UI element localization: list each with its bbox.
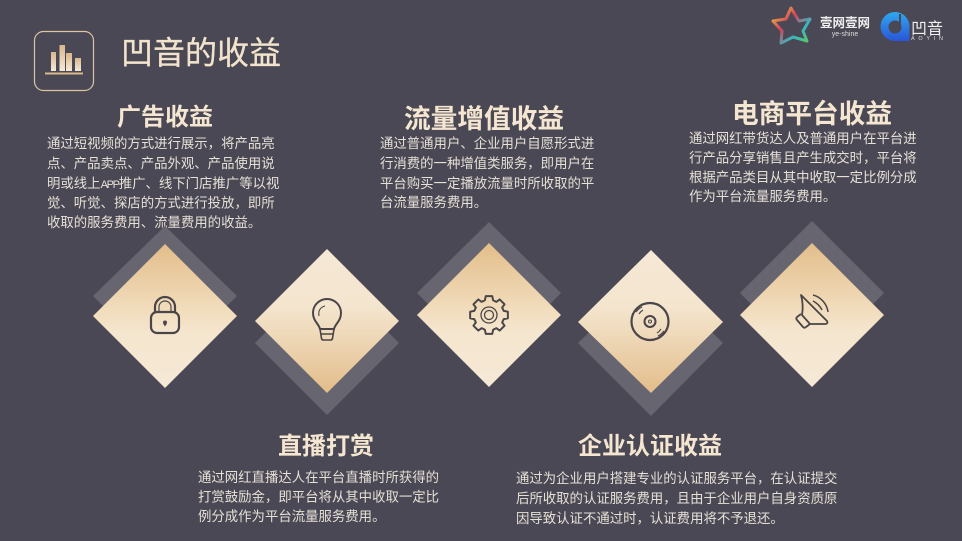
text block: live-stream tips (198, 469, 439, 524)
title: 凹音的收益 (121, 35, 281, 71)
heading: advertising revenue: 广告收益 (117, 104, 213, 131)
text block: traffic value-added revenue: 通过普通用户、企业用户自愿形式进 (380, 135, 594, 151)
text block: traffic value-added revenue (380, 135, 594, 210)
text block: e-commerce platform revenue: 根据产品类目从其中收取一定比例分成 (689, 170, 917, 185)
diamond: gear (417, 222, 561, 387)
heading: enterprise certification revenue: 企业认证收益 (578, 433, 722, 460)
logo: ye-shine (773, 8, 870, 43)
text block: advertising revenue: 通过短视频的方式进行展示，将产品亮 (47, 135, 275, 151)
panel: live-stream tips (198, 433, 439, 524)
logo: AOYIN (880, 12, 943, 42)
text block: advertising revenue: 收取的服务费用、流量费用的收益。 (47, 215, 261, 230)
heading: e-commerce platform revenue: 电商平台收益 (732, 99, 892, 129)
heading: live-stream tips: 直播打赏 (278, 433, 374, 460)
heading: traffic value-added revenue: 流量增值收益 (404, 104, 564, 134)
text block: advertising revenue: 明或线上APP推广、线下门店推广等以视 (47, 175, 279, 191)
text block: e-commerce platform revenue: 行产品分享销售且产生成交时，平台将 (689, 150, 917, 166)
text block: live-stream tips: 通过网红直播达人在平台直播时所获得的 (198, 469, 439, 485)
logo: ye-shine: ye-shine (832, 31, 858, 38)
panel: advertising revenue (47, 104, 279, 230)
text block: enterprise certification revenue: 后所收取的认证服务费用，且由于企业用户自身资质原 (516, 490, 837, 506)
icon: speaker (796, 295, 828, 328)
text block: e-commerce platform revenue (689, 130, 917, 204)
text block: live-stream tips: 例分成作为平台流量服务费用。 (198, 509, 385, 524)
text block: advertising revenue: 觉、听觉、探店的方式进行投放，即所 (47, 196, 275, 210)
logo: ye-shine: 壹网壹网 (820, 15, 870, 30)
text block: enterprise certification revenue: 因导致认证不通过时，认证费用将不予退还。 (516, 511, 784, 526)
text block: traffic value-added revenue: 行消费的一种增值类服务，即用户在 (380, 155, 594, 171)
icon: title bar chart badge (34, 32, 94, 90)
text block: enterprise certification revenue: 通过为企业用户搭建专业的认证服务平台，在认证提交 (516, 470, 837, 486)
icon: disc (632, 303, 668, 340)
panel: enterprise certification revenue (516, 433, 837, 526)
diamond: light bulb (255, 249, 399, 415)
text block: live-stream tips: 打赏鼓励金，即平台将从其中收取一定比 (198, 488, 439, 504)
logo: AOYIN: 凹音 (911, 20, 943, 38)
logo: AOYIN: AOYIN (911, 36, 943, 42)
text block: advertising revenue: 点、产品卖点、产品外观、产品使用说 (47, 155, 275, 171)
panel: traffic value-added revenue (380, 104, 594, 210)
panel: e-commerce platform revenue (689, 99, 917, 204)
text block: e-commerce platform revenue: 通过网红带货达人及普通用户在平台进 (689, 130, 917, 146)
icon: lock (151, 297, 179, 333)
text block: traffic value-added revenue: 平台购买一定播放流量时所收取的平 (380, 176, 594, 191)
text block: e-commerce platform revenue: 作为平台流量服务费用。 (689, 189, 836, 204)
icon: gear (470, 296, 508, 334)
text block: advertising revenue (47, 135, 279, 230)
diamond: lock (93, 226, 237, 388)
icon: light bulb (313, 299, 341, 340)
text block: traffic value-added revenue: 台流量服务费用。 (380, 195, 487, 210)
text block: enterprise certification revenue (516, 470, 837, 526)
diamond: speaker (740, 221, 884, 387)
diamond: disc (578, 250, 723, 416)
